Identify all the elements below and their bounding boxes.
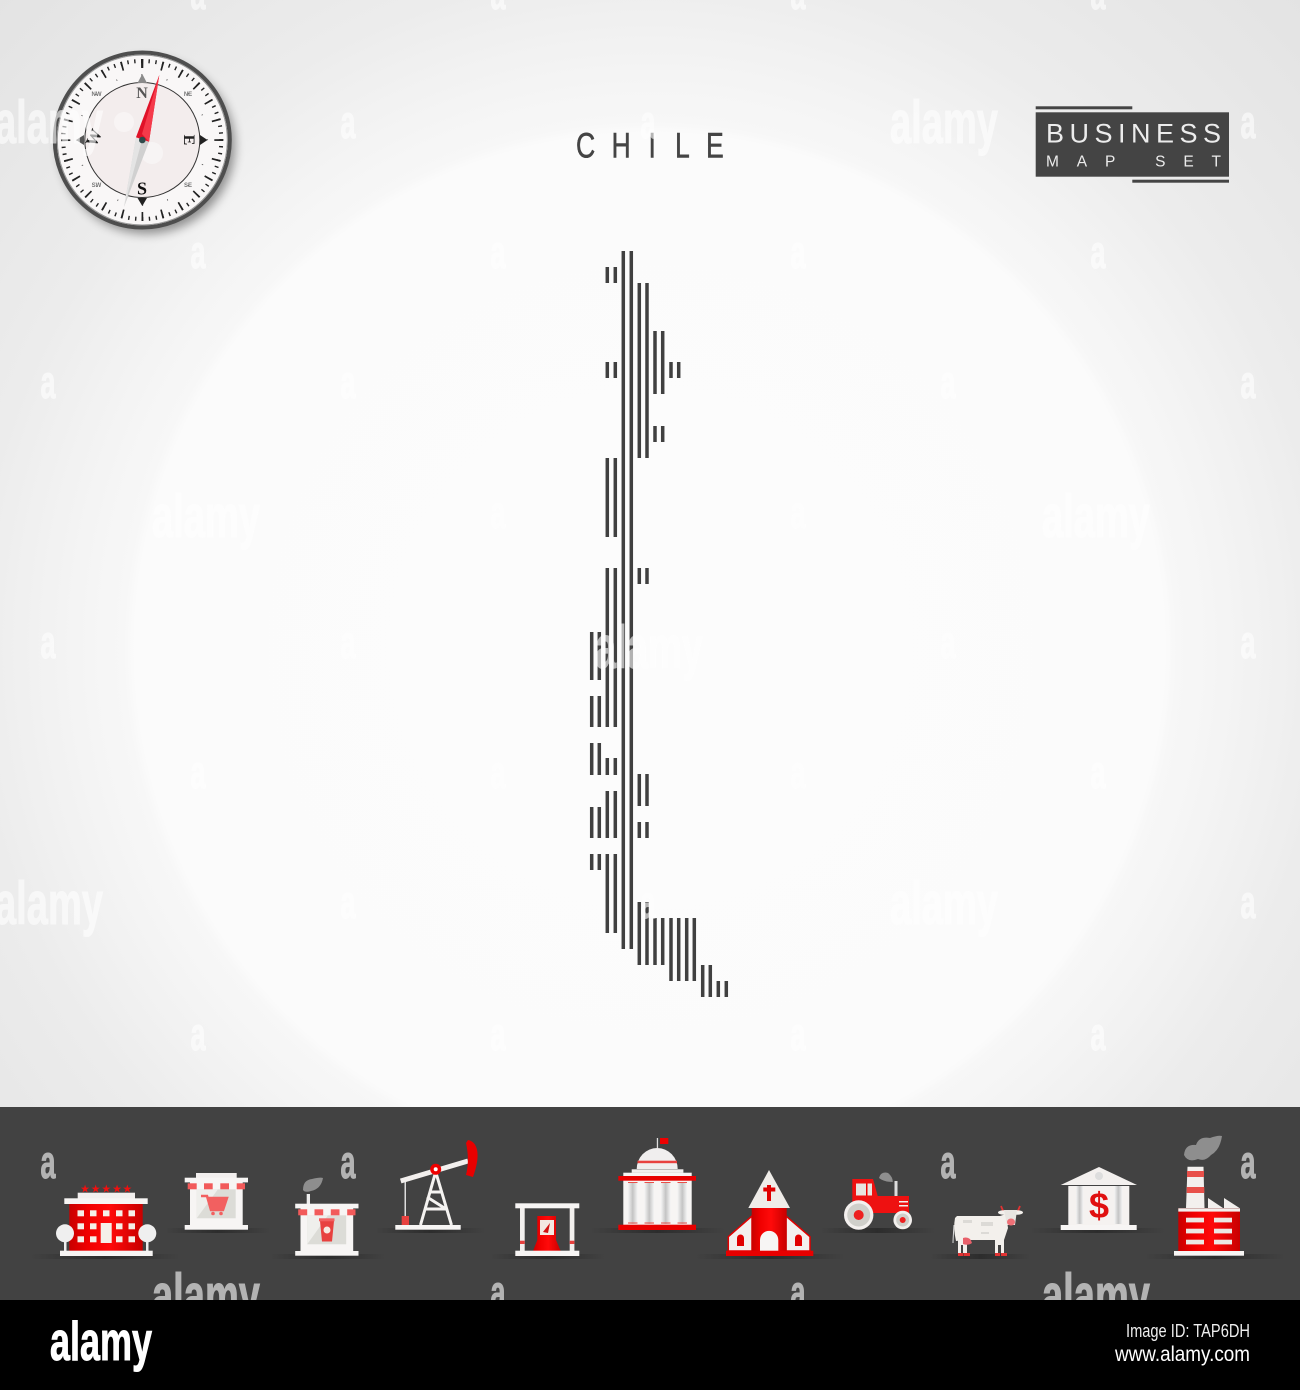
watermarks: a xyxy=(40,1136,56,1188)
icon: capitol building xyxy=(618,1138,696,1230)
icon: bank: $ xyxy=(1089,1185,1109,1226)
icon: tractor xyxy=(844,1173,912,1230)
intercardinal labels: SE xyxy=(184,183,192,189)
intercardinal labels: NW xyxy=(92,92,102,98)
compass tick marks xyxy=(63,60,222,220)
intercardinal labels: SW xyxy=(92,183,102,189)
icon: hotel: ★ xyxy=(80,1184,90,1196)
footer logo: alamy xyxy=(50,1310,152,1372)
icon: factory xyxy=(1174,1136,1244,1256)
watermarks: a xyxy=(640,876,656,928)
watermarks: a xyxy=(1240,1136,1256,1188)
watermarks: alamy xyxy=(1042,1262,1150,1329)
watermarks: a xyxy=(940,356,956,408)
business map set badge xyxy=(1036,106,1229,183)
watermarks: a xyxy=(940,616,956,668)
watermarks: a xyxy=(340,876,356,928)
watermarks: alamy xyxy=(0,89,103,156)
badge text: BUSINESS xyxy=(1046,119,1221,149)
watermarks: a xyxy=(790,1266,806,1318)
title xyxy=(576,126,724,165)
compass direction triangles xyxy=(76,74,208,206)
compass letters: E xyxy=(180,135,197,145)
watermarks: a xyxy=(190,226,206,278)
striped vertical map of Chile xyxy=(592,251,726,997)
compass letters xyxy=(82,85,197,198)
watermarks: a xyxy=(40,356,56,408)
watermarks: alamy xyxy=(0,870,103,937)
watermarks: a xyxy=(490,1266,506,1318)
icon: coffee shop xyxy=(295,1178,358,1256)
title: I xyxy=(648,126,656,165)
icon: shopping store xyxy=(185,1173,248,1230)
watermarks: a xyxy=(190,746,206,798)
icon: gas station xyxy=(515,1203,579,1256)
compass xyxy=(55,52,235,234)
watermarks: a xyxy=(790,486,806,538)
watermarks: a xyxy=(340,1136,356,1188)
footer url: www.alamy.com xyxy=(1114,1343,1250,1366)
title: H xyxy=(612,126,631,165)
title: L xyxy=(675,126,690,165)
icon: church xyxy=(726,1170,813,1256)
icon: cow xyxy=(953,1206,1023,1256)
intercardinal labels xyxy=(92,92,192,189)
watermarks: alamy xyxy=(1042,483,1150,550)
icon: hotel: ★ xyxy=(122,1184,132,1196)
watermarks: a xyxy=(40,616,56,668)
icon: hotel: ★ xyxy=(101,1184,111,1196)
icon: hotel: ★ xyxy=(112,1184,122,1196)
watermarks: a xyxy=(790,226,806,278)
watermarks: a xyxy=(340,616,356,668)
watermarks: a xyxy=(190,1008,206,1060)
compass letters: W xyxy=(82,126,106,149)
watermarks: a xyxy=(490,226,506,278)
badge text: MAP SET xyxy=(1046,154,1222,171)
icon: hotel: ★ xyxy=(91,1184,101,1196)
watermarks: a xyxy=(1240,356,1256,408)
background panel xyxy=(0,0,1300,1107)
watermarks: alamy xyxy=(890,89,998,156)
icon: bank xyxy=(1061,1167,1137,1230)
watermarks: a xyxy=(1090,226,1106,278)
icon: hotel xyxy=(56,1184,156,1256)
watermarks: a xyxy=(340,356,356,408)
watermarks: a xyxy=(490,486,506,538)
watermarks: alamy xyxy=(152,1262,260,1329)
watermarks: a xyxy=(1090,746,1106,798)
watermarks: a xyxy=(1240,876,1256,928)
compass glass highlights xyxy=(114,112,163,164)
watermarks: a xyxy=(790,746,806,798)
watermarks: a xyxy=(490,746,506,798)
watermarks: a xyxy=(1240,616,1256,668)
title: E xyxy=(706,126,724,165)
bottom icon band xyxy=(0,1107,1300,1300)
watermarks: alamy xyxy=(890,870,998,937)
watermarks: a xyxy=(1240,96,1256,148)
footer bar xyxy=(0,1300,1300,1390)
watermarks: a xyxy=(940,1136,956,1188)
ground shadows xyxy=(30,1228,1285,1259)
watermarks: alamy xyxy=(595,614,703,681)
watermarks: a xyxy=(490,1008,506,1060)
compass letters: N xyxy=(136,85,148,102)
watermarks: a xyxy=(790,1008,806,1060)
intercardinal labels: NE xyxy=(184,92,192,98)
footer image id: Image ID: TAP6DH xyxy=(1126,1321,1250,1341)
compass letters: S xyxy=(137,178,147,198)
watermarks: a xyxy=(640,96,656,148)
watermarks: a xyxy=(340,96,356,148)
title: C xyxy=(576,126,595,165)
watermarks: a xyxy=(1090,1008,1106,1060)
watermarks: alamy xyxy=(152,483,260,550)
compass needle xyxy=(124,75,159,207)
badge text xyxy=(1046,119,1222,171)
icon: oil pump xyxy=(395,1140,478,1230)
compass inner ring xyxy=(85,82,200,198)
